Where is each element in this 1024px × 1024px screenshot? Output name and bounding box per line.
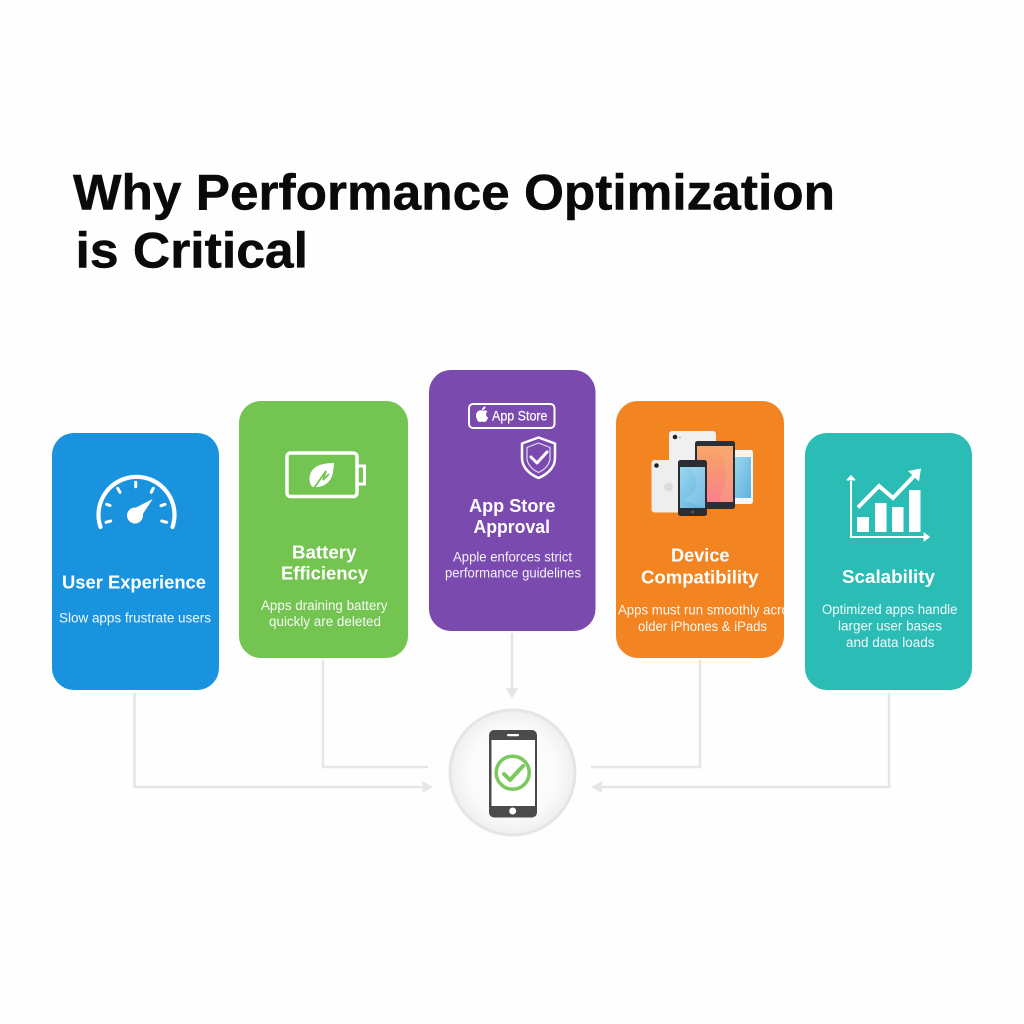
panel: user experience	[52, 433, 219, 690]
description	[822, 602, 958, 650]
description: and data loads	[846, 635, 935, 650]
icon: shield with check	[522, 438, 555, 478]
panel: app store approval	[429, 370, 596, 631]
heading: Device	[671, 544, 730, 566]
description	[261, 598, 388, 629]
arrow: scalability to phone	[591, 693, 889, 793]
white back phone	[669, 431, 716, 491]
heading	[641, 544, 759, 588]
heading: User Experience	[62, 572, 206, 592]
icon: growth chart	[847, 468, 930, 541]
card background	[429, 370, 596, 631]
tablet	[695, 441, 735, 509]
description: Optimized apps handle	[822, 602, 958, 617]
icon: speedometer	[98, 477, 175, 527]
white front phone	[652, 460, 682, 512]
arrow: device compatibility to phone	[591, 660, 700, 767]
central hub: phone with check mark	[450, 710, 575, 835]
panel: device compatibility	[616, 401, 802, 658]
card background	[805, 433, 972, 690]
heading: Scalability	[842, 566, 936, 587]
panel: battery efficiency	[239, 401, 408, 658]
arrow: battery efficiency to phone	[323, 660, 428, 767]
hub circle	[450, 710, 575, 835]
title	[73, 164, 835, 278]
description: older iPhones & iPads	[638, 619, 767, 634]
heading: Approval	[474, 516, 550, 537]
black phone	[678, 460, 707, 516]
right phone	[733, 450, 753, 504]
heading: Efficiency	[281, 562, 369, 584]
card background	[616, 401, 784, 658]
heading	[281, 542, 369, 584]
icon: group of devices	[652, 431, 753, 516]
description: Apps must run smoothly across	[618, 602, 802, 618]
connector arrows	[134, 633, 889, 793]
description: Apps draining battery	[261, 598, 388, 613]
icon: green check	[496, 756, 529, 789]
description: Apple enforces strict	[453, 550, 572, 564]
icon: battery with leaf	[287, 453, 364, 496]
panel: scalability	[805, 433, 972, 690]
heading	[469, 495, 556, 537]
description: quickly are deleted	[269, 614, 381, 629]
description: larger user bases	[838, 618, 942, 634]
icon: app store badge: App Store	[492, 408, 548, 424]
heading: Compatibility	[641, 566, 759, 588]
heading: App Store	[469, 495, 556, 516]
icon: app store badge	[469, 404, 554, 428]
arrow: app store approval to phone	[506, 633, 518, 699]
description: performance guidelines	[445, 566, 581, 580]
card background	[52, 433, 219, 690]
title: Why Performance Optimization	[73, 164, 835, 220]
description: Slow apps frustrate users	[59, 610, 211, 626]
heading: Battery	[292, 542, 357, 562]
arrow: user experience to phone	[134, 693, 433, 793]
title: is Critical	[76, 222, 308, 278]
description	[445, 550, 581, 580]
icon: smartphone	[489, 730, 537, 818]
card background	[239, 401, 408, 658]
description	[618, 604, 784, 631]
